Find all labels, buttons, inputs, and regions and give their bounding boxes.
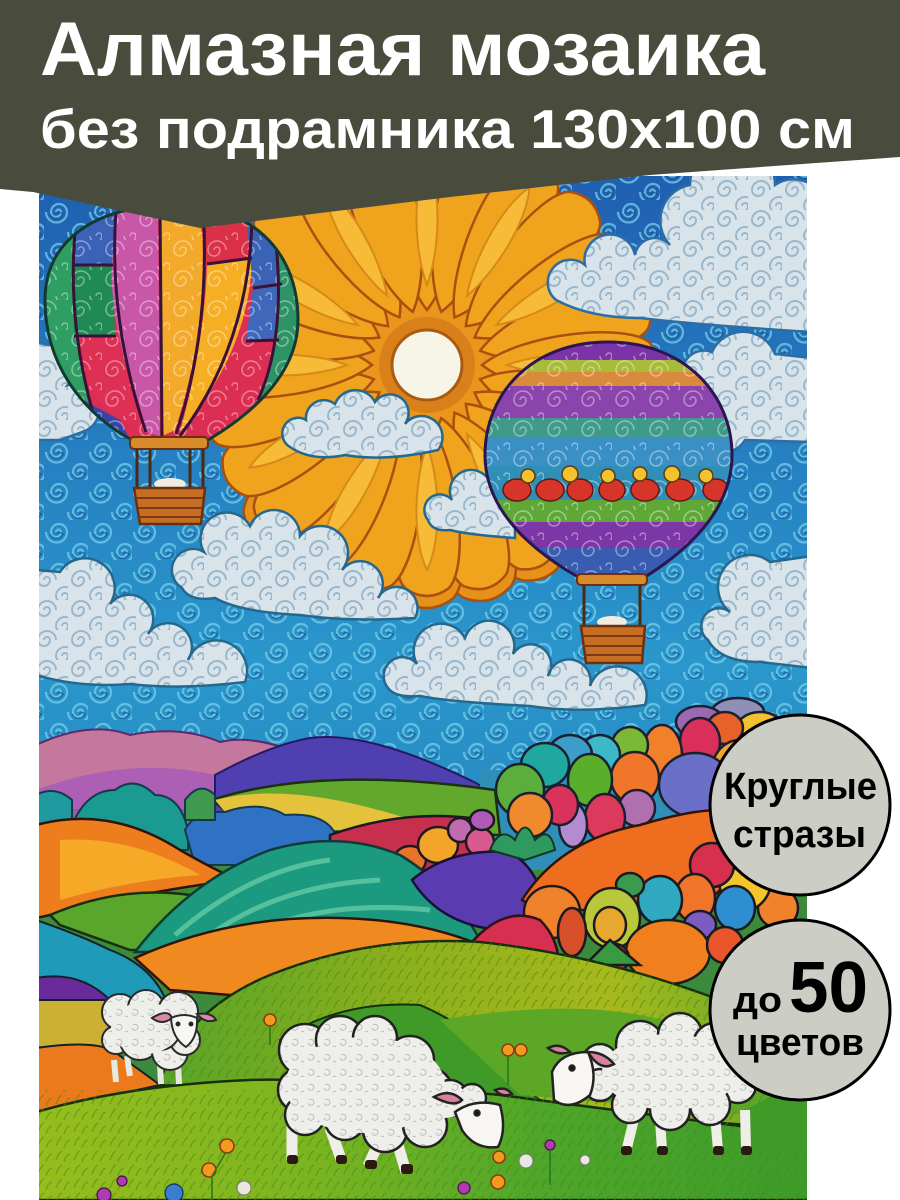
landscape: orange highlight band: [60, 839, 200, 900]
landscape: bushes: [36, 784, 336, 865]
landscape: red mound: [472, 916, 558, 955]
landscape: left side bands: [36, 920, 165, 1112]
cloud: bottom centre: [384, 621, 647, 710]
landscape: right lower field: [746, 1096, 807, 1136]
landscape: purple mound: [412, 852, 545, 930]
badge: up to 50 colours: до: [733, 979, 782, 1020]
landscape: green texture: [158, 941, 740, 1124]
landscape: colourful mounds lower right: [524, 843, 798, 984]
sky with swirls: [39, 176, 807, 784]
cloud: right: [681, 332, 812, 452]
sheep: right, facing left: [548, 1013, 756, 1155]
landscape: distant mountains: [36, 729, 500, 830]
landscape: green striped hill: [50, 892, 190, 950]
landscape: foreground grass strokes: [39, 1090, 807, 1200]
title line 1: Алмазная мозаика: [40, 7, 766, 92]
badge: up to 50 colours: [710, 920, 890, 1100]
header banner: [0, 0, 900, 228]
hot air balloon: right: [480, 340, 740, 663]
badge: round rhinestones: Круглые: [724, 766, 877, 808]
sheep: small, left: [102, 990, 216, 1084]
illustration: sky, balloons, hills and sheep: [36, 133, 827, 1200]
cloud: left lower: [36, 558, 247, 687]
landscape: teal striped hill: [135, 841, 480, 952]
landscape: foreground meadow: [36, 1080, 812, 1200]
sheep: large, grazing: [278, 1016, 512, 1174]
cloud: small by balloon: [424, 470, 515, 538]
landscape: colourful mounds at the back right: [480, 698, 810, 870]
badge: up to 50 colours: цветов: [736, 1022, 864, 1064]
landscape: green plant: [490, 828, 555, 860]
landscape: inner darker hill: [280, 1004, 540, 1100]
badge: round rhinestones: [710, 715, 890, 895]
title line 2: без подрамника 130х100 см: [40, 98, 855, 160]
cloud: in front of sun: [282, 390, 442, 458]
landscape base: [39, 811, 807, 1086]
hot air balloon: left: [40, 200, 302, 524]
badge: up to 50 colours: 50: [789, 948, 868, 1028]
cloud: top right: [546, 176, 807, 333]
landscape: orange-yellow hill: [135, 918, 480, 995]
landscape: red and small mounds: [330, 810, 494, 874]
landscape: right meadow hill: [440, 1008, 770, 1114]
landscape: teal hill stripes: [175, 860, 430, 935]
landscape: big green hill: [156, 940, 740, 1125]
sun: [211, 185, 655, 610]
landscape: yellow-green hill: [212, 780, 500, 835]
cloud: left: [36, 342, 100, 440]
landscape: orange hill left: [36, 819, 238, 918]
badge: round rhinestones: стразы: [733, 814, 866, 856]
cloud: centre large: [172, 510, 418, 619]
landscape: orange hill right: [522, 810, 740, 910]
landscape: yellow band on hill: [216, 794, 402, 830]
cloud: right lower: [701, 555, 812, 668]
flowers: [97, 1014, 590, 1200]
